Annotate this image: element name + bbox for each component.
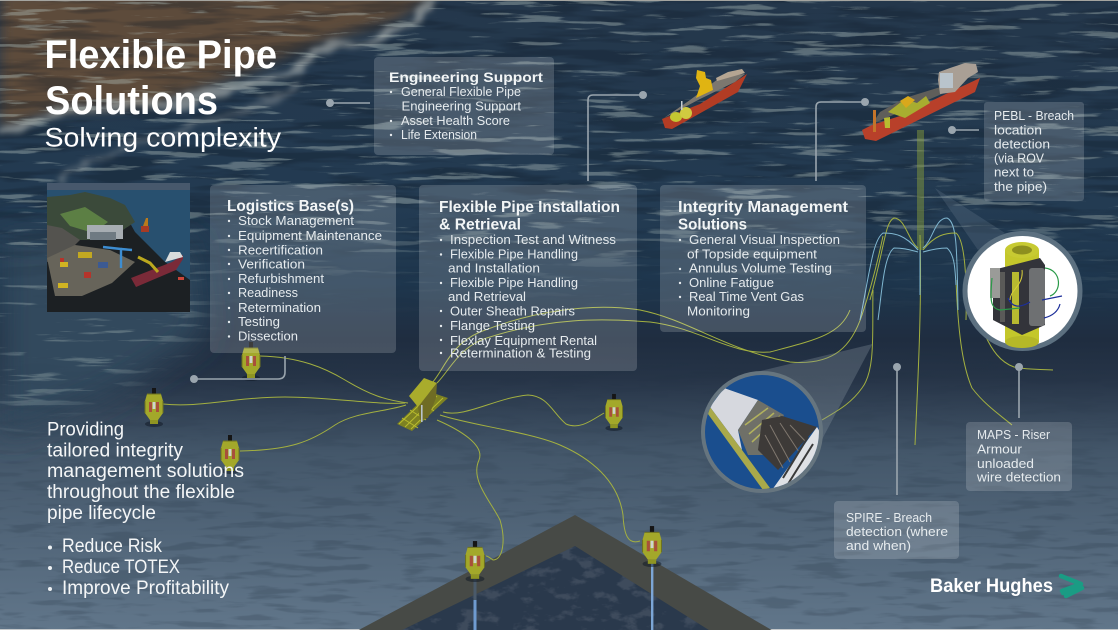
panel: MAPS: MAPS - Riser: [977, 428, 1050, 442]
panel: PEBL: the pipe): [994, 180, 1047, 194]
panel: MAPS: unloaded: [977, 457, 1034, 471]
panel: integrity management solutions: Annulus Volume Testing: [689, 262, 832, 276]
panel: PEBL: next to: [994, 166, 1034, 180]
panel: logistics base: Dissection: [238, 330, 298, 344]
panel: flexible pipe installation and retrieval: Flexlay Equipment Rental: [450, 334, 597, 348]
panel: integrity management solutions: Solutions: [678, 216, 747, 234]
text block: integrity statement: [47, 420, 244, 524]
panel: PEBL: location: [994, 124, 1042, 138]
panel: logistics base: Logistics Base(s): [227, 198, 354, 215]
panel: logistics base: Retermination: [238, 301, 321, 315]
panel: logistics base: Recertification: [238, 244, 323, 258]
panel: flexible pipe installation and retrieval: Flange Testing: [450, 319, 535, 333]
panel: logistics base: Stock Management: [238, 214, 355, 228]
panel: SPIRE: [834, 501, 959, 559]
panel: PEBL: [984, 102, 1084, 201]
subsea flowlines: [163, 235, 1053, 560]
connector: MAPS: [1015, 363, 1023, 418]
connector: installation: [588, 91, 647, 181]
riser system from the vessel: [860, 130, 966, 320]
connector: engineering support: [326, 99, 370, 107]
panel: integrity management solutions: Monitoring: [687, 304, 750, 318]
trench in the seabed: [355, 515, 775, 630]
panel: engineering support: Engineering Support: [402, 100, 522, 114]
panel: engineering support: Engineering Support: [389, 69, 543, 85]
title: Flexible Pipe: [44, 33, 277, 77]
panel: flexible pipe installation and retrieval: Flexible Pipe Installation: [439, 199, 620, 216]
panel: logistics base photo: [47, 183, 190, 312]
connector: SPIRE: [893, 363, 901, 495]
foam band across the sea surface: [0, 2, 432, 178]
panel: flexible pipe installation and retrieval: Inspection Test and Witness: [450, 233, 616, 247]
panel: logistics base: Readiness: [238, 286, 298, 300]
panel: logistics base: Testing: [238, 315, 280, 329]
connector: PEBL: [948, 126, 979, 134]
text block: integrity statement: tailored integrity: [47, 440, 184, 462]
connector: logistics base: [190, 356, 285, 383]
panel: PEBL: PEBL - Breach: [994, 109, 1074, 123]
title: [44, 33, 282, 152]
panel: flexible pipe installation and retrieval: Retermination & Testing: [450, 346, 591, 360]
panel: logistics base: [210, 185, 396, 353]
panel: engineering support: General Flexible Pipe: [401, 85, 521, 99]
inset: flexible pipe cutaway: [700, 370, 825, 495]
panel: MAPS: wire detection: [976, 470, 1061, 484]
panel: flexible pipe installation and retrieval: [419, 185, 637, 371]
MAPS callout cone: [935, 188, 1005, 250]
title: Solutions: [45, 79, 218, 123]
text block: integrity statement: Providing: [47, 420, 124, 440]
ship: installation vessel: [662, 69, 747, 129]
panel: flexible pipe installation and retrieval: Flexible Pipe Handling: [450, 276, 578, 290]
panel: SPIRE: detection (where: [846, 525, 948, 539]
panel: integrity management solutions: Real Time Vent Gas: [689, 290, 804, 304]
title: Solving complexity: [44, 122, 282, 152]
logo: Baker Hughes: Baker Hughes: [930, 576, 1053, 597]
well risers into the trench: [474, 562, 653, 630]
panel: logistics base: Equipment Maintenance: [238, 229, 382, 243]
panel: integrity management solutions: of Topside equipment: [687, 248, 818, 262]
panel: SPIRE: SPIRE - Breach: [846, 511, 932, 525]
panel: flexible pipe installation and retrieval: and Retrieval: [448, 290, 526, 304]
panel: integrity management solutions: Online Fatigue: [689, 276, 774, 290]
ship: FPSO: [862, 63, 980, 141]
panel: PEBL: (via ROV: [994, 152, 1045, 166]
list: benefits: [48, 536, 229, 599]
panel: integrity management solutions: [660, 185, 866, 332]
text block: integrity statement: pipe lifecycle: [47, 503, 156, 524]
panel: MAPS: Armour: [977, 442, 1022, 456]
panel: logistics base: Refurbishment: [238, 272, 325, 286]
panel: flexible pipe installation and retrieval: Flexible Pipe Handling: [450, 248, 578, 262]
panel: logistics base: Verification: [238, 258, 305, 272]
panel: engineering support: [374, 57, 554, 155]
panel: PEBL: detection: [994, 138, 1050, 152]
panel: engineering support: Life Extension: [401, 128, 477, 142]
panel: integrity management solutions: General Visual Inspection: [689, 233, 840, 247]
panel: flexible pipe installation and retrieval: Outer Sheath Repairs: [450, 304, 575, 318]
connector: integrity management: [816, 98, 869, 181]
panel: integrity management solutions: Integrity Management: [678, 199, 848, 216]
panel: SPIRE: and when): [846, 539, 911, 553]
list: benefits: Reduce Risk: [62, 536, 162, 557]
text block: integrity statement: throughout the flexible: [47, 482, 235, 503]
list: benefits: Improve Profitability: [62, 578, 229, 599]
inset: MAPS clamp on riser: [962, 231, 1082, 351]
panel: flexible pipe installation and retrieval: and Installation: [448, 262, 540, 276]
panel: engineering support: Asset Health Score: [401, 114, 510, 128]
text block: integrity statement: management solutions: [47, 461, 244, 482]
subsea tree units: [145, 342, 661, 582]
panel: flexible pipe installation and retrieval: & Retrieval: [439, 216, 521, 234]
manifold: [397, 378, 448, 431]
pipe callout cone: [748, 344, 872, 447]
panel: MAPS: [966, 422, 1072, 491]
list: benefits: Reduce TOTEX: [62, 557, 180, 578]
